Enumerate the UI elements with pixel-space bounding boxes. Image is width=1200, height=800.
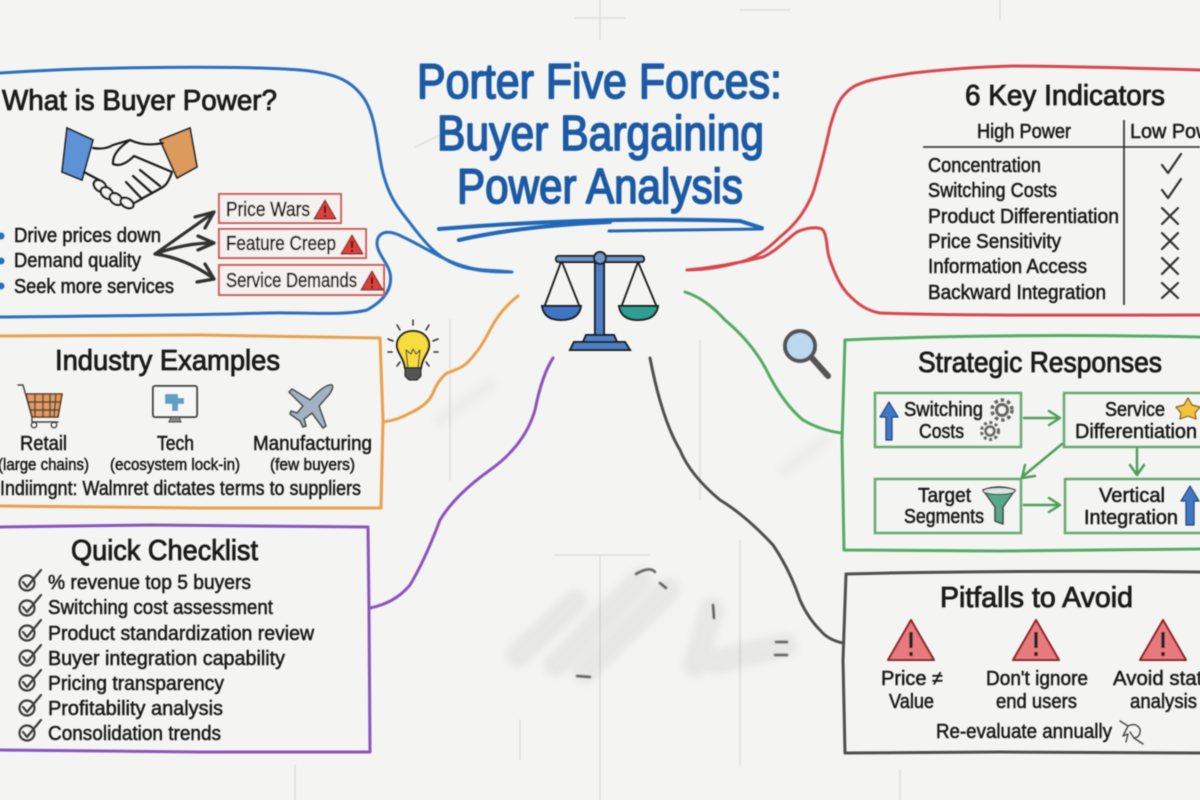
industry labels: (ecosystem lock-in)	[110, 455, 240, 474]
checklist items	[48, 572, 315, 745]
icon: balance scale	[542, 252, 658, 350]
heading: Pitfalls to Avoid	[940, 582, 1133, 614]
indicators table: Backward Integration	[928, 282, 1106, 304]
flow labels: Service	[1105, 399, 1165, 421]
callout: service demands: Service Demands	[226, 270, 357, 292]
panel outline: purple box	[0, 358, 553, 752]
title	[417, 55, 782, 214]
indicators table: Information Access	[928, 256, 1087, 278]
callout: feature creep	[219, 229, 366, 258]
callout: price wars	[219, 194, 341, 223]
callout: feature creep: Feature Creep	[226, 233, 336, 255]
example note: Indiimgnt: Walmret dictates terms to suppliers	[0, 478, 361, 500]
panel outline: blue speech bubble	[0, 67, 512, 317]
icon: gears	[982, 400, 1012, 440]
icon: funnel	[983, 487, 1015, 524]
background smudges	[295, 0, 1000, 800]
heading: 6 Key Indicators	[965, 80, 1165, 112]
panel: pitfalls to avoid	[650, 358, 1200, 753]
icon: airplane	[289, 385, 333, 428]
bullet list: Drive prices down	[14, 225, 161, 247]
icon: star	[1176, 398, 1200, 419]
bullet list: Seek more services	[14, 276, 174, 298]
callout: price wars: Price Wars	[226, 199, 310, 221]
flow labels: Costs	[919, 421, 964, 443]
industry labels: Manufacturing	[253, 433, 372, 455]
industry labels: (large chains)	[0, 455, 89, 474]
flow labels: Segments	[904, 506, 984, 528]
icon: up arrows	[880, 402, 1199, 525]
checklist items: Buyer integration capability	[48, 648, 285, 670]
panel outline: dark box	[650, 358, 1200, 753]
pitfall labels	[881, 668, 1200, 713]
pitfall labels: Don't ignore	[986, 668, 1088, 690]
panel outline: orange box	[0, 296, 518, 508]
icon: monitor	[153, 386, 197, 422]
title: Buyer Bargaining	[437, 107, 764, 161]
checklist items: % revenue top 5 buyers	[48, 572, 251, 594]
indicators table: Switching Costs	[928, 180, 1057, 202]
checklist items: Profitability analysis	[48, 698, 223, 720]
pitfall labels: Price ≠	[881, 668, 943, 690]
heading: What is Buyer Power?	[2, 85, 277, 117]
title underline	[439, 220, 762, 240]
icon: lightbulb	[388, 320, 438, 380]
flow labels: Switching	[904, 399, 983, 421]
pitfall labels: end users	[996, 691, 1077, 713]
bullet list	[0, 225, 174, 298]
panel: quick checklist	[0, 358, 553, 752]
icon: handshake	[62, 128, 197, 210]
panel outline: red speech bubble	[687, 66, 1200, 315]
checklist items: Switching cost assessment	[48, 597, 273, 619]
flow arrows	[1022, 411, 1144, 512]
arrows to consequences	[155, 212, 214, 282]
panel: industry examples	[0, 296, 518, 508]
flow labels	[904, 399, 1197, 529]
panel: strategic responses	[685, 292, 1200, 551]
panel: 6 key indicators	[687, 66, 1200, 315]
indicators table: Product Differentiation	[928, 206, 1119, 228]
icon: shopping cart	[18, 385, 62, 428]
indicators table	[923, 120, 1200, 305]
warning icons	[888, 620, 1186, 660]
checklist items: Pricing transparency	[48, 673, 224, 695]
checklist items: Product standardization review	[48, 623, 315, 645]
flow labels: Vertical	[1099, 485, 1165, 507]
panel outline: green box	[685, 292, 1200, 551]
flow boxes	[875, 393, 1200, 533]
industry labels: (few buyers)	[270, 455, 355, 474]
title: Power Analysis	[457, 160, 743, 214]
pitfall labels: Value	[889, 691, 934, 713]
flow labels: Integration	[1084, 507, 1178, 529]
icon: magnifying glass	[785, 331, 828, 376]
icon: review loop	[1120, 721, 1143, 744]
industry labels: Retail	[20, 433, 67, 455]
indicators table: Concentration	[928, 155, 1041, 177]
heading: Strategic Responses	[918, 347, 1162, 379]
flow labels: Differentiation	[1075, 421, 1197, 443]
heading: Quick Checklist	[71, 535, 258, 567]
panel: what is buyer power	[0, 67, 512, 317]
industry labels	[0, 433, 372, 474]
heading: Industry Examples	[55, 345, 280, 377]
industry labels: Tech	[157, 433, 194, 455]
checkmark icons	[20, 570, 41, 740]
annual review note: Re-evaluate annually	[936, 721, 1112, 743]
bullet list: Demand quality	[14, 250, 141, 272]
checklist items: Consolidation trends	[48, 723, 221, 745]
indicators table: High Power	[977, 121, 1071, 143]
flow labels: Target	[918, 485, 971, 507]
indicators table: Price Sensitivity	[928, 231, 1061, 253]
title: Porter Five Forces:	[417, 55, 782, 109]
